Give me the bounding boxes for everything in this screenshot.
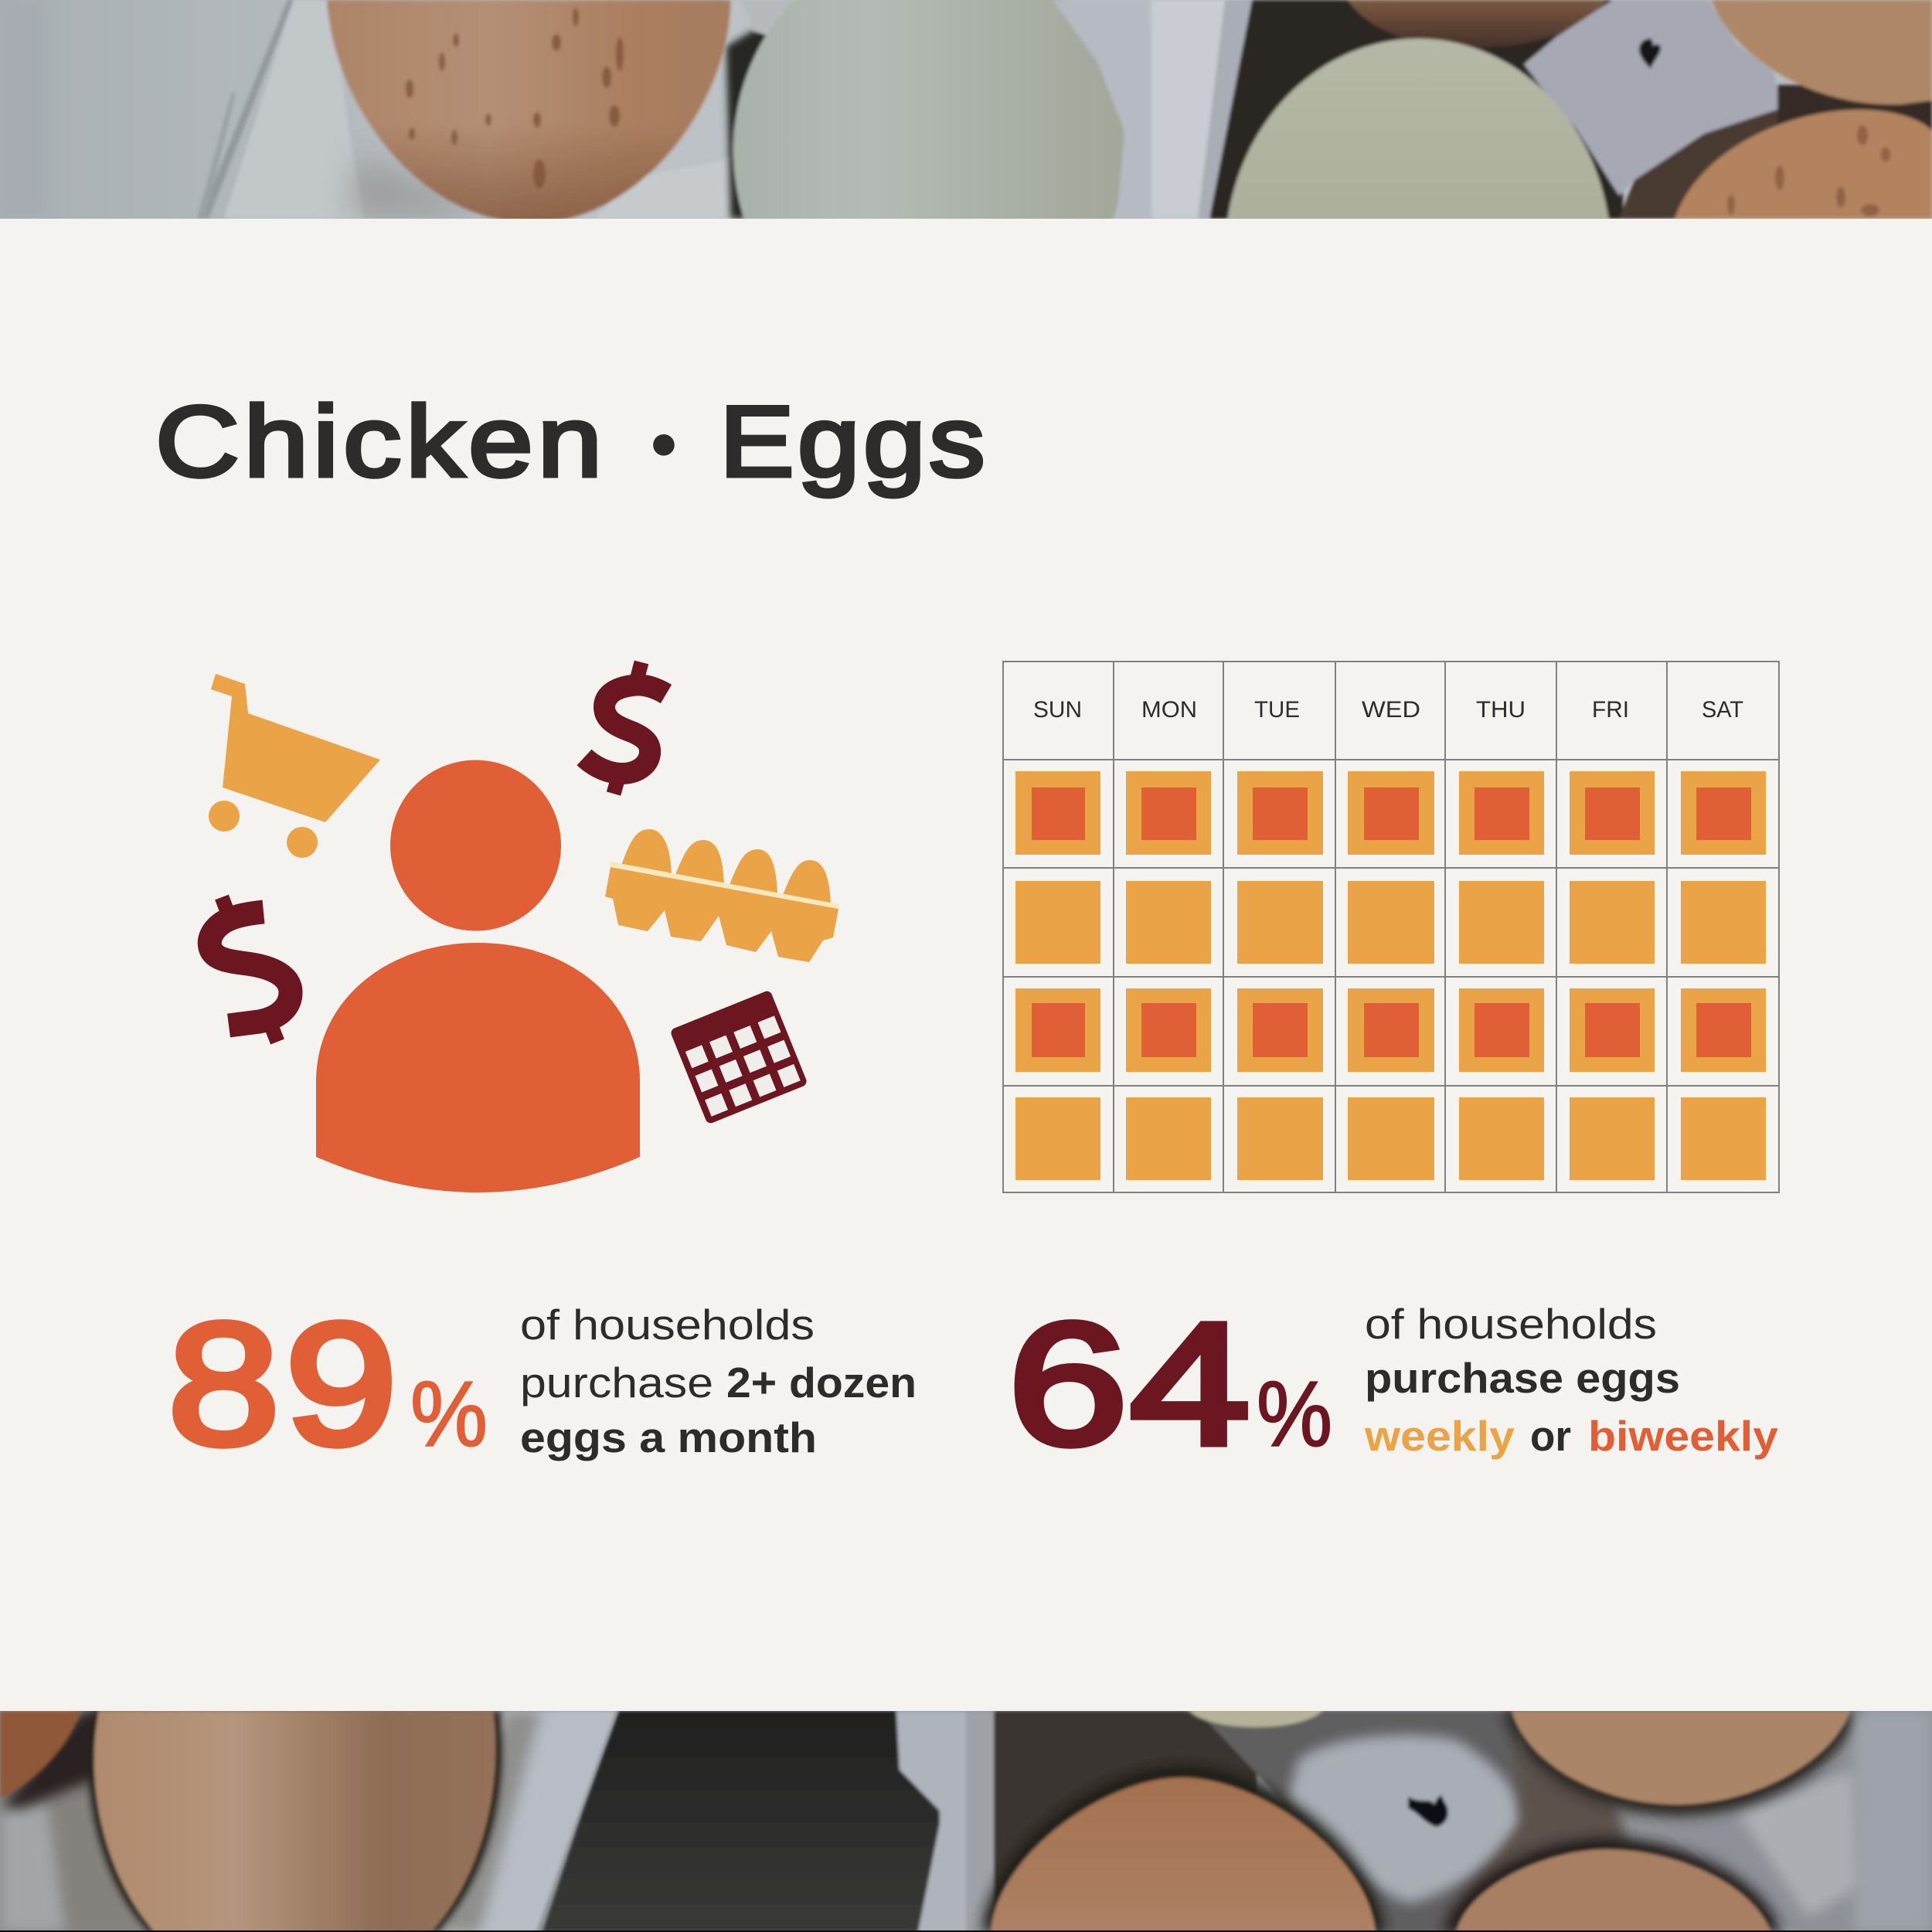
calendar row 4: amber squares [1015, 1097, 1766, 1180]
icon: dollar sign, upper right [584, 662, 666, 794]
big number 89% [168, 1287, 488, 1481]
stat: 64% of households [1008, 1287, 1778, 1481]
photo band: eggs in carton, bottom [0, 1711, 1932, 1932]
title: Chicken [155, 385, 607, 498]
text: 89% description: eggs a month [520, 1413, 817, 1461]
title: · [642, 372, 685, 517]
big number 64%: 64 [1008, 1287, 1252, 1481]
text: 64% description: or [1530, 1412, 1571, 1460]
calendar weekday labels [1033, 697, 1743, 723]
icon: shopping cart [209, 674, 380, 858]
text: 64% description: of households [1365, 1300, 1657, 1348]
calendar row 2: amber squares [1015, 881, 1766, 964]
photo band: eggs in carton, top [0, 0, 1932, 219]
panel: weekly calendar [1003, 662, 1779, 1192]
text: 64% description: weekly [1364, 1412, 1515, 1460]
big number 64% [1008, 1287, 1332, 1481]
text: 89% description: of households [520, 1301, 815, 1349]
text: 64% description [1364, 1300, 1778, 1460]
illustration: shopper with icons [209, 662, 838, 1192]
calendar weekday labels: SUN [1033, 697, 1082, 723]
calendar weekday labels: SAT [1702, 697, 1743, 723]
stat: 89% of households [168, 1287, 917, 1481]
icon: mini calendar [669, 990, 808, 1124]
big number 89%: % [410, 1362, 488, 1466]
calendar weekday labels: TUE [1254, 697, 1300, 723]
icon: dollar sign, left [209, 897, 291, 1042]
text: 64% description: biweekly [1588, 1412, 1778, 1460]
big number 64%: % [1257, 1362, 1332, 1466]
calendar row 3: amber squares with orange centres [1015, 988, 1766, 1072]
title: Eggs [719, 385, 988, 498]
calendar weekday labels: MON [1141, 697, 1197, 723]
calendar weekday labels: WED [1362, 697, 1420, 723]
icon: shopper [316, 760, 640, 1192]
text: 89% description: purchase [520, 1359, 713, 1406]
icon: egg carton [605, 829, 838, 962]
big number 89%: 89 [168, 1287, 403, 1481]
title [155, 372, 988, 517]
text: 89% description: 2+ dozen [726, 1359, 917, 1406]
text: 64% description: purchase eggs [1365, 1354, 1680, 1402]
calendar weekday labels: FRI [1592, 697, 1629, 723]
calendar row 1: amber squares with orange centres [1015, 771, 1766, 855]
text: 89% description [520, 1301, 917, 1461]
calendar weekday labels: THU [1476, 697, 1526, 723]
